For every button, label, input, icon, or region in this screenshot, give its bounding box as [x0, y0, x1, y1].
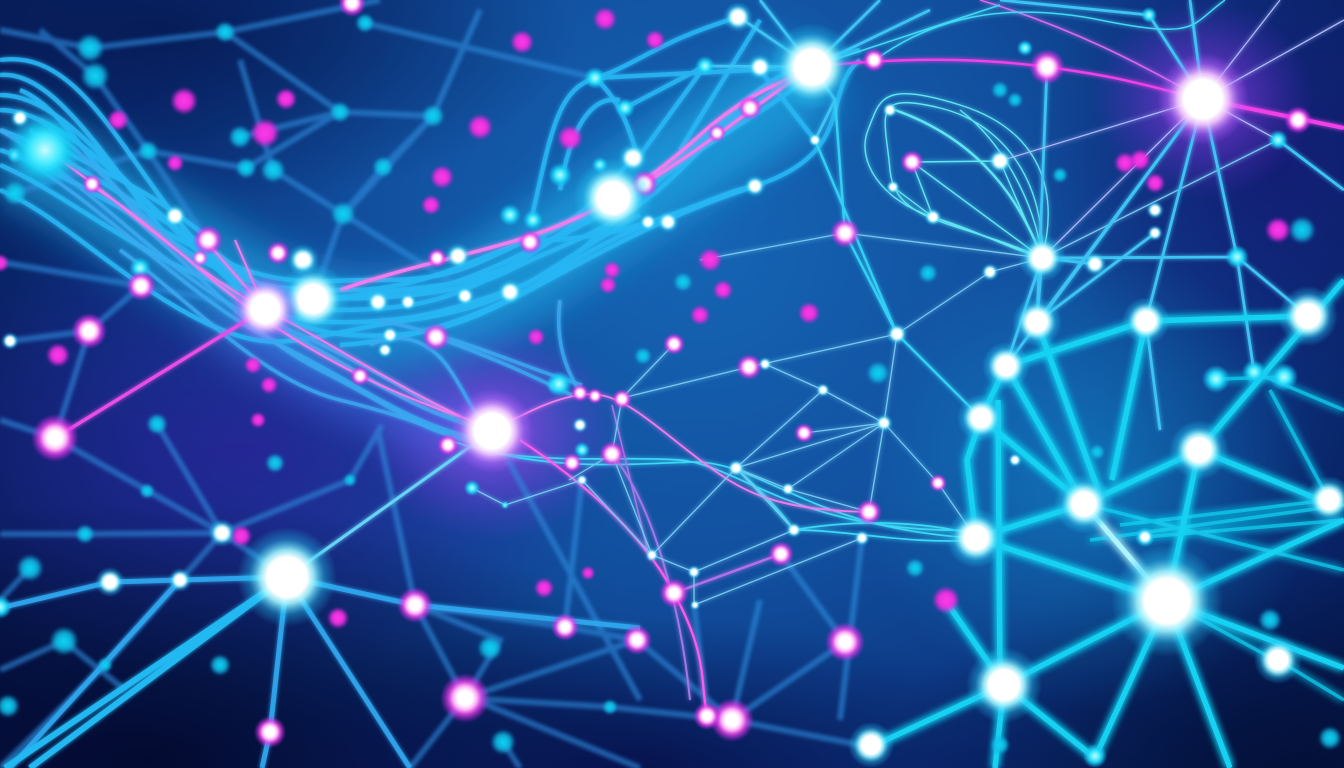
magenta light streaks top right — [812, 0, 1344, 128]
bright white-violet hub nodes — [231, 53, 1249, 627]
thick cyan network lower right — [871, 280, 1344, 768]
bright magenta connector — [55, 309, 265, 438]
bright cyan fibre to the right of centre hub — [450, 440, 976, 541]
bright blue lines lower left — [0, 577, 640, 768]
bright beam to bottom-left corner — [5, 431, 492, 768]
fans from the top right hub — [705, 0, 1344, 430]
pink strands — [60, 67, 869, 716]
dim magenta particles — [0, 7, 1291, 629]
curved strand bundle: lower sweep — [0, 120, 582, 445]
loop arcs near top right — [865, 94, 1048, 258]
fine mid-right web — [472, 100, 1278, 605]
curved strand bundle: upper sweep — [0, 17, 860, 345]
dim blue background connection lines — [0, 0, 871, 768]
soft glow behind strand bundle — [0, 67, 812, 435]
